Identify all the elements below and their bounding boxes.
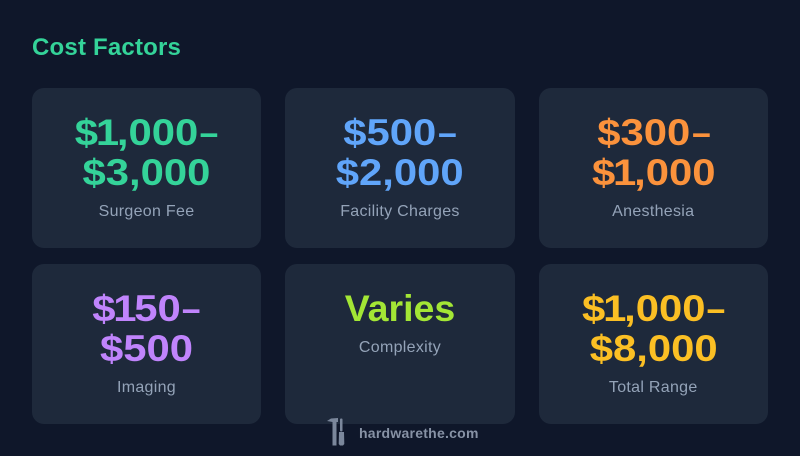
value: facility charges: $2,000 [336, 151, 464, 193]
value: anesthesia: – [691, 111, 710, 153]
panel: total range [538, 264, 768, 424]
value: surgeon fee: – [200, 111, 218, 153]
value: surgeon fee: $1,000 [75, 111, 198, 153]
value: imaging: $500 [100, 327, 193, 369]
label: complexity: Complexity [359, 339, 441, 356]
panel: complexity [285, 264, 515, 424]
icon: hammer and screwdriver [327, 418, 344, 446]
value: total range: $1,000 [582, 287, 705, 329]
value: imaging [92, 287, 201, 369]
value: facility charges [336, 111, 464, 193]
panel: surgeon fee [32, 88, 261, 248]
value: imaging: – [182, 287, 201, 329]
value: anesthesia [592, 111, 715, 193]
footer watermark [327, 418, 479, 446]
value: surgeon fee: $3,000 [83, 151, 210, 193]
label: imaging: Imaging [117, 379, 176, 396]
value: facility charges: – [438, 111, 456, 153]
value: total range: $8,000 [589, 327, 717, 369]
value: complexity: Varies [345, 287, 455, 329]
panel: imaging [32, 264, 261, 424]
value: anesthesia: $300 [597, 111, 690, 153]
value: total range: – [706, 287, 725, 329]
value: imaging: $150 [92, 287, 181, 329]
label: surgeon fee: Surgeon Fee [99, 203, 194, 220]
panel: anesthesia [538, 88, 768, 248]
panel: facility charges [285, 88, 515, 248]
label: total range: Total Range [609, 379, 698, 396]
value: facility charges: $500 [344, 111, 437, 153]
label: anesthesia: Anesthesia [612, 203, 694, 220]
footer text: hardwarethe.com [359, 425, 479, 441]
value: surgeon fee [75, 111, 218, 193]
value: total range [582, 287, 725, 369]
label: facility charges: Facility Charges [340, 203, 460, 220]
title: Cost Factors [32, 34, 181, 61]
value: anesthesia: $1,000 [592, 151, 715, 193]
